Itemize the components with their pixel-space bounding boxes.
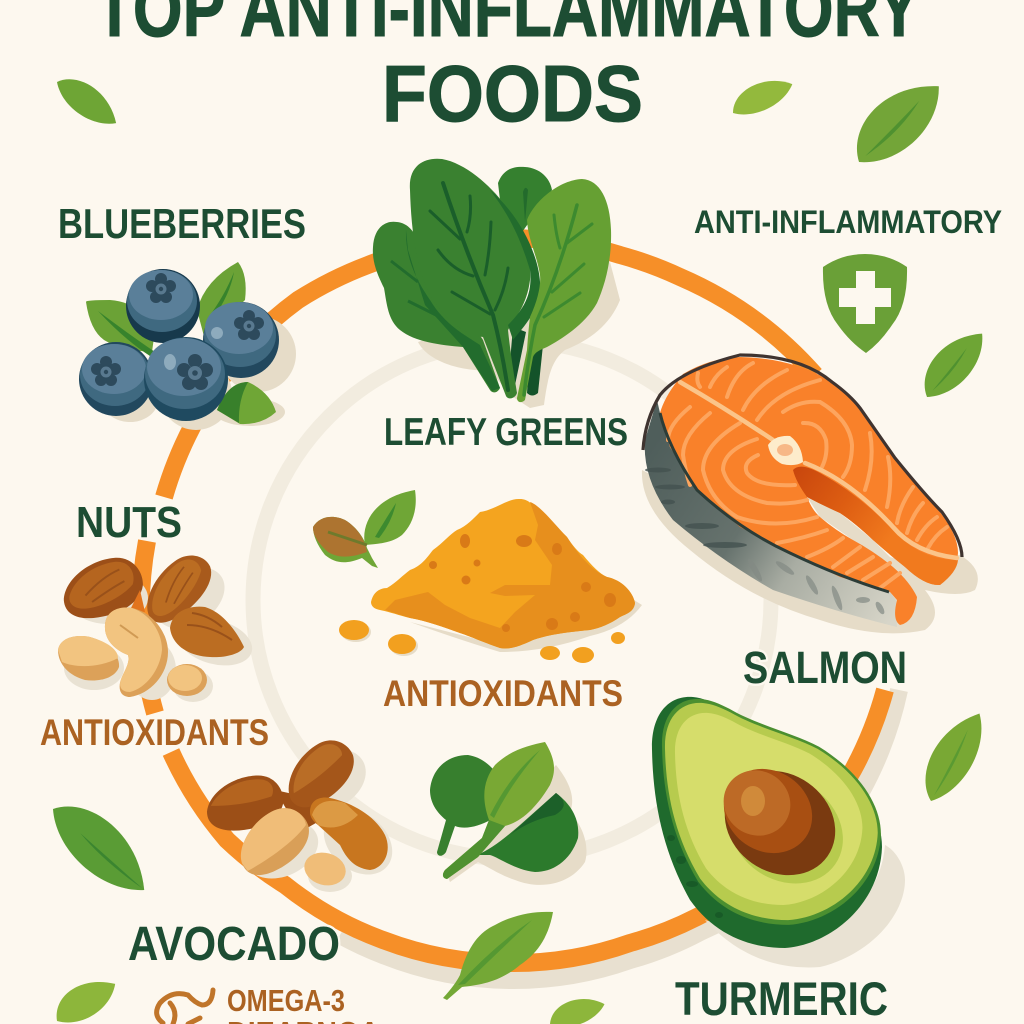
label: antioxidants centre: ANTIOXIDANTS: [383, 673, 623, 714]
leaf: top right: [840, 66, 955, 179]
powder shadow: [410, 600, 642, 652]
main leaf: [410, 159, 540, 398]
powder specks: [429, 534, 616, 632]
berry: front: [144, 337, 228, 421]
ring shadow: [340, 690, 899, 980]
right leaf: [517, 179, 611, 402]
title: FOODS: [382, 49, 643, 138]
food: small spinach sprigs: [430, 742, 587, 885]
avocado specks: [667, 835, 723, 918]
label: salmon: SALMON: [743, 642, 907, 693]
label: leafy greens: LEAFY GREENS: [384, 411, 628, 454]
avocado shadow: [705, 845, 905, 967]
salmon tail band: [793, 467, 958, 585]
food: salmon steak: [642, 355, 978, 633]
dark right leaf: [477, 793, 578, 872]
berries shadow: [102, 316, 296, 430]
almond 3: [170, 607, 244, 657]
avocado skin: [652, 697, 882, 948]
peanut: [58, 636, 119, 680]
salmon outline: [643, 355, 962, 557]
salmon skin: [645, 400, 897, 627]
leaf: right upper: [912, 320, 995, 408]
lower small nut: [301, 848, 349, 890]
notch: [807, 497, 925, 597]
avocado pit: [704, 750, 864, 905]
sprig shadow: [445, 765, 587, 885]
leaf: over ring bottom: [443, 912, 553, 1000]
sprig: [313, 490, 416, 568]
food: avocado: [652, 697, 905, 967]
leaf: top left: [49, 69, 125, 134]
lower brown nut: [310, 798, 388, 870]
powder dark side: [385, 502, 635, 649]
label: nuts: NUTS: [76, 498, 182, 547]
powder drops: [339, 620, 625, 663]
leaf: bottom edge: [545, 991, 608, 1024]
lower dark fill: [275, 790, 330, 832]
label: avocado: AVOCADO: [128, 918, 340, 971]
berry leaves: [86, 262, 276, 424]
label: turmeric: TURMERIC: [675, 972, 888, 1024]
nut shadows: [64, 555, 257, 702]
left leaf: [373, 222, 500, 392]
leaf: right lower: [912, 703, 995, 810]
orange under nuts: [130, 590, 145, 612]
avocado flesh inner: [675, 713, 862, 905]
food: turmeric powder: [313, 490, 642, 663]
almond 2: [132, 546, 223, 630]
orange ring: [141, 238, 885, 963]
food: nuts: [58, 546, 257, 702]
left round leaf: [430, 755, 500, 856]
lower almond top: [274, 731, 366, 815]
icon: omega-3 fish squiggle: [157, 990, 213, 1024]
salmon spine lines: [680, 382, 957, 558]
cashew: [105, 608, 168, 697]
salmon bone: [768, 436, 803, 465]
skin markings light: [746, 557, 886, 616]
berry: right: [203, 302, 279, 378]
leaf: left lower: [38, 789, 162, 907]
food: lower mixed nuts: [207, 731, 405, 892]
food: blueberries: [79, 262, 296, 430]
leaf: bottom left: [47, 968, 123, 1024]
skin markings: [645, 468, 747, 548]
avocado flesh outer: [665, 703, 878, 920]
almond 1: [61, 556, 146, 620]
label: blueberries: BLUEBERRIES: [58, 200, 306, 247]
small nut: [167, 664, 207, 696]
icon: anti-inflammatory shield: [823, 254, 907, 353]
label: antioxidants left: ANTIOXIDANTS: [40, 712, 269, 753]
lower light nut: [228, 800, 320, 882]
lower almond left: [207, 776, 283, 831]
label: omega-3: OMEGA-3: [227, 983, 345, 1018]
berry: top: [126, 269, 200, 343]
salmon flesh: [660, 357, 958, 625]
back leaf and dark stem: [498, 167, 552, 396]
leaf: top middle: [726, 70, 797, 123]
salmon stripes: [668, 363, 947, 588]
title: [95, 0, 920, 138]
inner pale ring: [253, 341, 771, 859]
spinach shadow: [418, 262, 620, 408]
avocado rim: [662, 699, 881, 925]
berry: left: [79, 342, 153, 416]
lower nuts shadow: [237, 737, 405, 892]
powder pile: [371, 499, 635, 649]
food: leafy greens: [373, 159, 620, 408]
light leaf with stem: [443, 742, 554, 879]
salmon shadow: [642, 470, 978, 633]
